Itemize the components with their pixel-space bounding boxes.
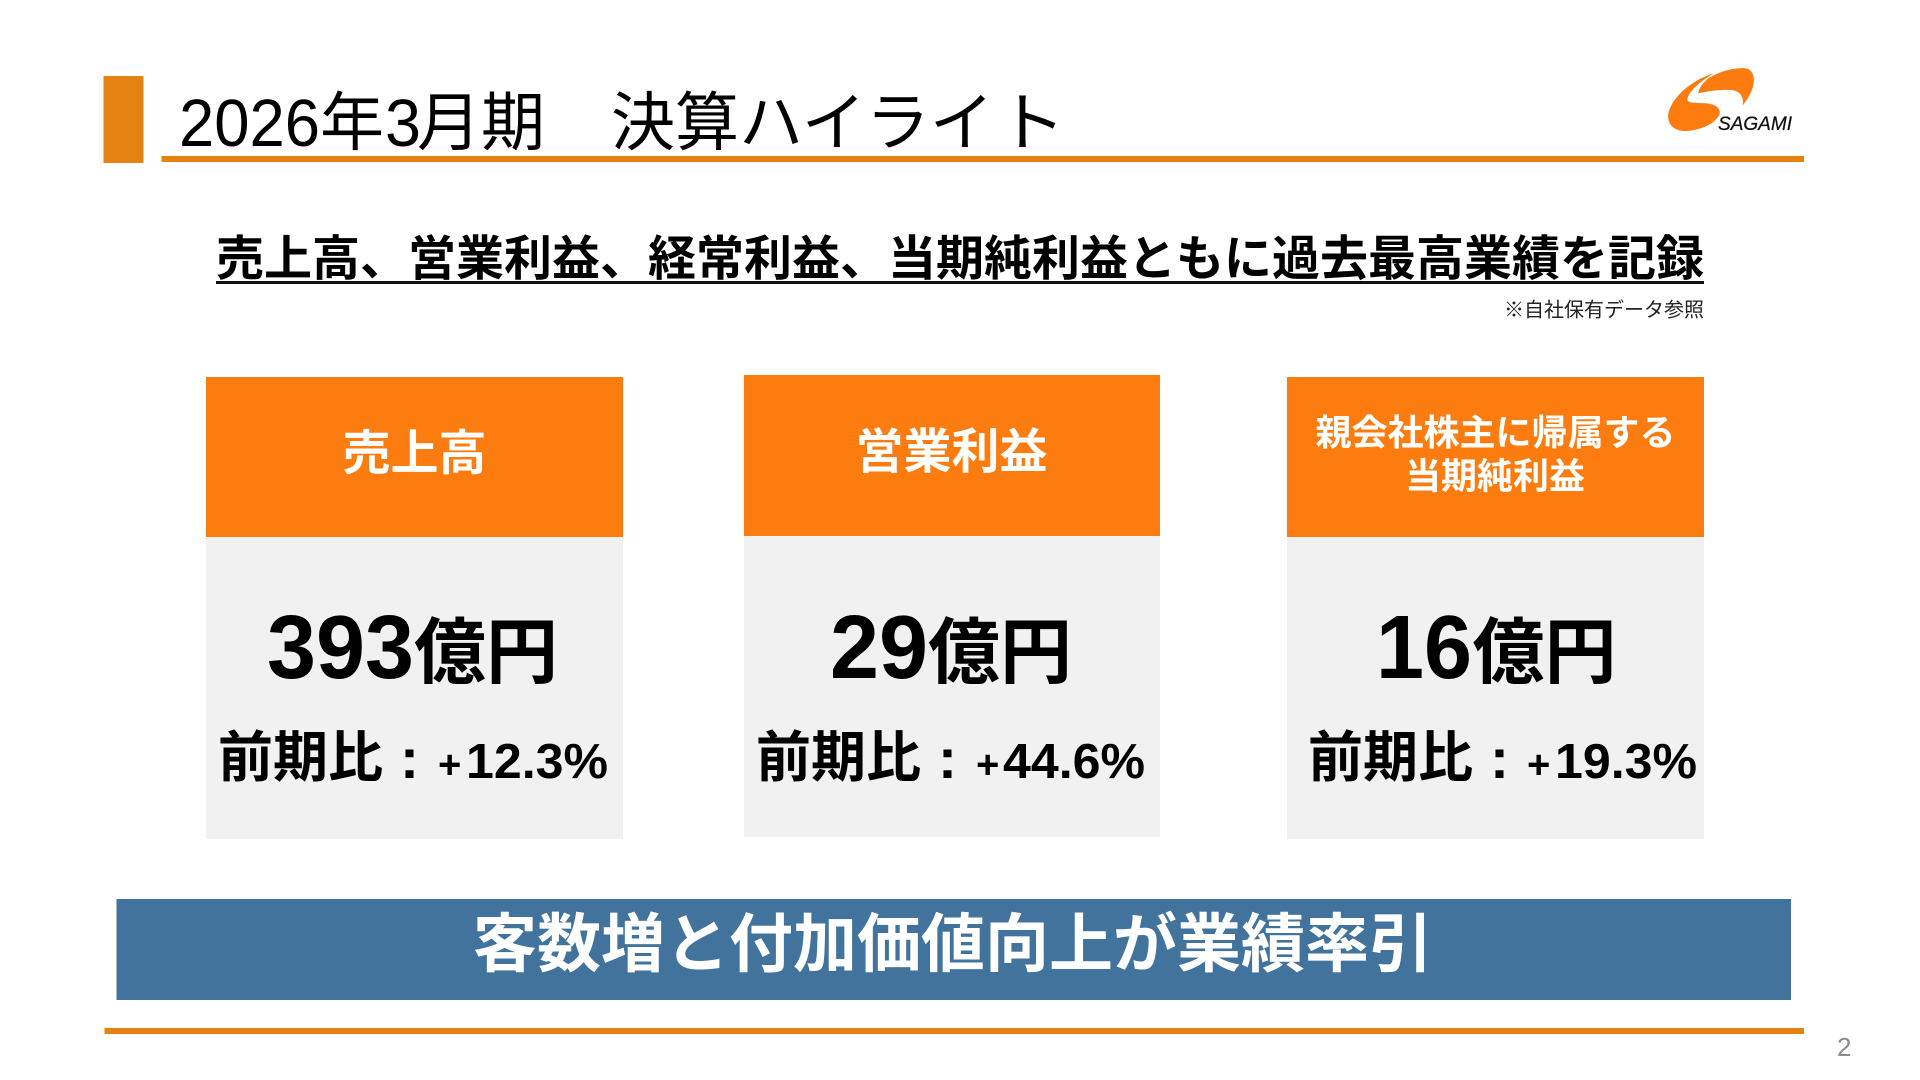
change: +19.3%: + bbox=[1527, 743, 1550, 787]
change: +19.3%: 19.3% bbox=[1555, 735, 1697, 789]
change: +19.3% bbox=[1308, 712, 1697, 792]
change: +19.3%: 前期比 bbox=[1308, 712, 1473, 792]
heading: 売上高: 売上高 bbox=[342, 414, 487, 484]
value: 393億円: 393 bbox=[267, 598, 414, 698]
value: 29億円: 億円 bbox=[928, 593, 1072, 698]
change: +44.6%: 前期比 bbox=[756, 712, 921, 792]
value: 29億円 bbox=[830, 593, 1072, 698]
change: +12.3% bbox=[218, 712, 608, 792]
panel: 親会社株主に帰属する当期純利益 bbox=[1287, 377, 1704, 839]
change: +19.3%: : bbox=[1490, 727, 1509, 791]
heading: 親会社株主に帰属する当期純利益 bbox=[1316, 404, 1676, 500]
value: 16億円: 億円 bbox=[1472, 593, 1617, 698]
page number: 2 bbox=[1837, 1032, 1851, 1062]
change: +44.6%: + bbox=[976, 743, 999, 787]
logo: SAGAMI bbox=[1668, 68, 1793, 135]
change: +12.3%: : bbox=[400, 727, 419, 791]
panel: 売上高 bbox=[206, 377, 623, 839]
logo: SAGAMI: SAGAMI bbox=[1718, 114, 1793, 135]
title block: 決算ハイライ bbox=[611, 72, 994, 164]
title block: ト bbox=[996, 72, 1066, 164]
value: 393億円: 億円 bbox=[414, 593, 558, 698]
value: 29億円: 29 bbox=[830, 598, 928, 698]
change: +12.3%: 前期比 bbox=[218, 712, 383, 792]
value: 393億円 bbox=[267, 593, 558, 698]
footnote: ※自社保有データ参照 bbox=[1504, 294, 1704, 323]
title block: 2026 bbox=[179, 86, 320, 161]
change: +44.6% bbox=[756, 712, 1145, 792]
title block: 年 bbox=[320, 72, 384, 164]
heading: 営業利益: 営業利益 bbox=[856, 412, 1048, 482]
banner bbox=[116, 894, 1791, 1000]
title block bbox=[104, 72, 1804, 164]
change: +12.3%: + bbox=[438, 743, 461, 787]
heading: 親会社株主に帰属する当期純利益: 親会社株主に帰属する bbox=[1316, 404, 1676, 456]
change: +44.6%: 44.6% bbox=[1003, 735, 1145, 789]
title block: 3 bbox=[385, 86, 421, 161]
change: +12.3%: 12.3% bbox=[466, 735, 608, 789]
panel: 営業利益 bbox=[744, 375, 1166, 837]
value: 16億円: 16 bbox=[1376, 598, 1472, 698]
headline: 売上高、営業利益、経常利益、当期純利益ともに過去最高業績を記録 bbox=[216, 219, 1704, 289]
change: +44.6%: : bbox=[938, 727, 957, 791]
title block: 月期 bbox=[417, 72, 545, 164]
value: 16億円 bbox=[1376, 593, 1617, 698]
heading: 親会社株主に帰属する当期純利益: 当期純利益 bbox=[1405, 448, 1585, 500]
banner: 客数増と付加価値向上が業績率引 bbox=[473, 894, 1433, 986]
